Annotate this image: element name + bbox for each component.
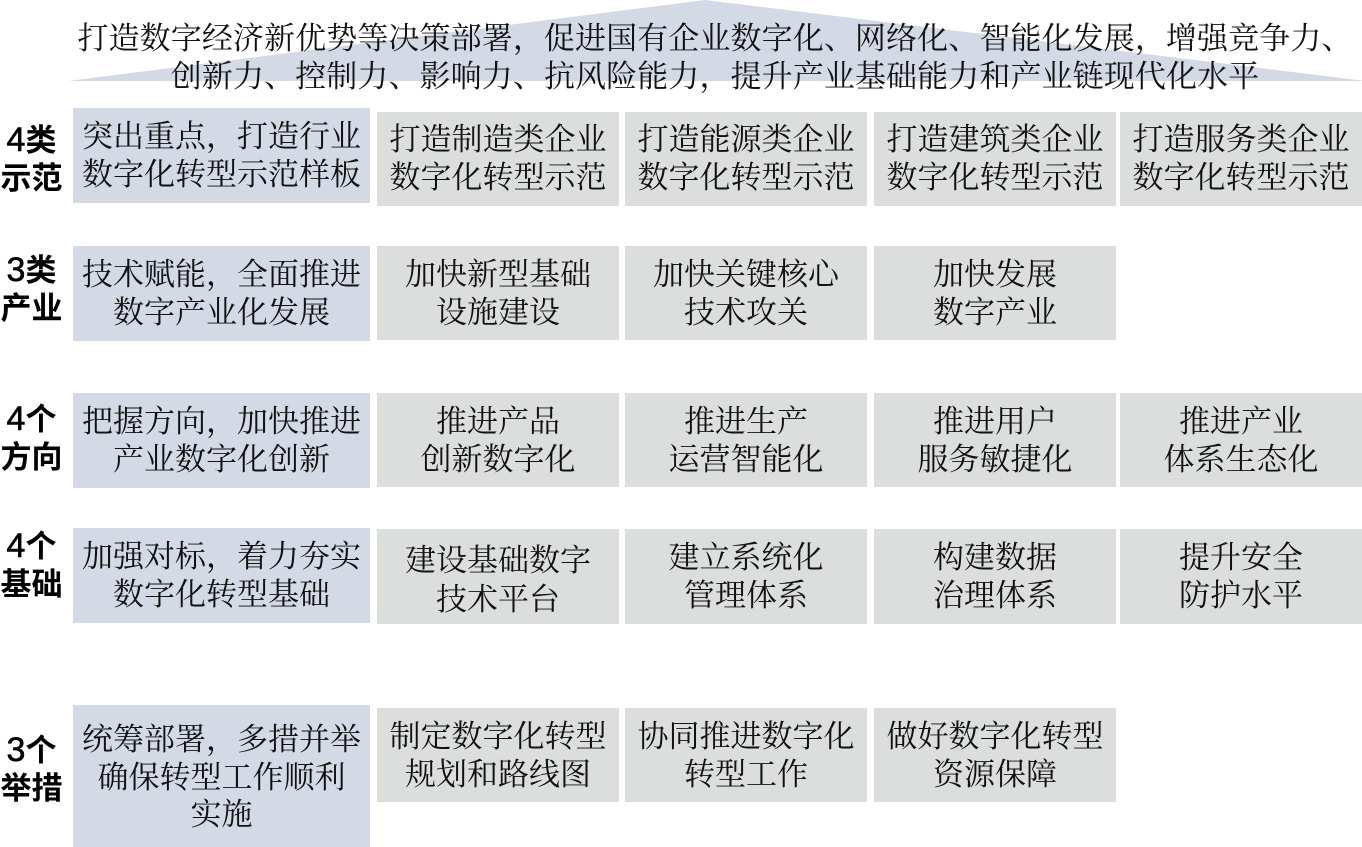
- row 5 heading box: 统筹部署，多措并举: [82, 714, 361, 759]
- box: 制造类: 打造制造类企业: [390, 114, 606, 159]
- box: 产业体系: 体系生态化: [1164, 434, 1318, 478]
- row 2 heading box: 技术赋能，全面推进: [82, 249, 361, 294]
- box: 关键核心技术: 加快关键核心: [653, 249, 839, 294]
- box: 管理体系: 建立系统化: [668, 532, 824, 577]
- row 3 heading box: [73, 393, 370, 488]
- box: 服务类: 数字化转型示范: [1132, 152, 1350, 196]
- box: 服务类: 打造服务类企业: [1132, 114, 1350, 159]
- row 1 heading box: 突出重点，打造行业: [82, 111, 361, 156]
- box: 建筑类: 打造建筑类企业: [886, 114, 1104, 159]
- box: 技术平台: [377, 529, 619, 624]
- box: 管理体系: 管理体系: [684, 570, 808, 614]
- box: 关键核心技术: [625, 246, 867, 340]
- row label: 4个基础: [0, 527, 62, 602]
- row 4 heading box: 数字化转型基础: [113, 568, 330, 614]
- row 3 heading box: 把握方向，加快推进: [82, 396, 361, 441]
- box: 规划路线图: [377, 708, 619, 802]
- row 1 heading box: 数字化转型示范样板: [82, 148, 361, 194]
- box: 资源保障: 资源保障: [933, 748, 1057, 794]
- box: 服务类: [1120, 112, 1362, 206]
- box: 规划路线图: 规划和路线图: [405, 748, 591, 794]
- box: 能源类: [625, 112, 867, 206]
- row 2 heading box: 数字产业化发展: [113, 286, 330, 332]
- box: 生产运营: [625, 393, 867, 487]
- box: 用户服务: 服务敏捷化: [918, 434, 1072, 478]
- row 5 heading box: 确保转型工作顺利: [98, 752, 346, 796]
- box: 技术平台: 建设基础数字: [405, 535, 591, 580]
- box: 用户服务: [874, 393, 1116, 487]
- box: 安全防护: 防护水平: [1179, 570, 1303, 614]
- row 1 heading box: [73, 108, 370, 203]
- row 5 heading box: 实施: [190, 789, 252, 834]
- box: 产业体系: [1120, 393, 1362, 487]
- box: 数字产业: 数字产业: [933, 286, 1057, 332]
- row 4 heading box: [73, 528, 370, 623]
- row label: 4个方向: 4个: [7, 400, 56, 438]
- box: 技术平台: 技术平台: [436, 574, 560, 618]
- box: 建筑类: 数字化转型示范: [886, 152, 1104, 196]
- row label: 4个基础: 基础: [0, 567, 62, 602]
- box: 产品创新: 推进产品: [436, 396, 560, 441]
- row label: 3个举措: 3个: [7, 731, 56, 769]
- row label: 4类示范: [0, 121, 62, 196]
- box: 数字产业: [874, 246, 1116, 340]
- row 3 heading box: 产业数字化创新: [113, 434, 330, 478]
- box: 产业体系: 推进产业: [1179, 396, 1303, 441]
- row label: 3个举措: 举措: [0, 771, 62, 806]
- row 2 heading box: [73, 246, 370, 341]
- box: 能源类: 打造能源类企业: [638, 114, 854, 159]
- box: 资源保障: [874, 708, 1116, 802]
- title text: 创新力、控制力、影响力、抗风险能力，提升产业基础能力和产业链现代化水平: [171, 50, 1259, 96]
- box: 规划路线图: 制定数字化转型: [390, 711, 606, 756]
- row label: 3类产业: 3类: [7, 251, 56, 289]
- row label: 4个基础: 4个: [7, 527, 56, 565]
- box: 产品创新: 创新数字化: [420, 434, 576, 478]
- box: 安全防护: [1120, 529, 1362, 624]
- box: 用户服务: 推进用户: [933, 396, 1057, 441]
- box: 数据治理: [874, 529, 1116, 624]
- row label: 3类产业: [0, 251, 62, 326]
- box: 协同推进: [625, 708, 867, 802]
- box: 关键核心技术: 技术攻关: [684, 286, 808, 332]
- row 5 heading box: [73, 705, 370, 847]
- box: 生产运营: 推进生产: [684, 396, 808, 441]
- box: 制造类: [377, 112, 619, 206]
- box: 新型基础设施: 加快新型基础: [405, 249, 591, 294]
- box: 能源类: 数字化转型示范: [638, 152, 854, 196]
- box: 协同推进: 协同推进数字化: [638, 711, 854, 756]
- row label: 4类示范: 4类: [7, 121, 56, 159]
- box: 安全防护: 提升安全: [1179, 532, 1303, 577]
- row label: 3个举措: [0, 731, 62, 806]
- box: 制造类: 数字化转型示范: [390, 152, 606, 196]
- box: 数字产业: 加快发展: [933, 249, 1057, 294]
- row label: 4个方向: [0, 400, 62, 475]
- box: 产品创新: [377, 393, 619, 487]
- row 4 heading box: 加强对标，着力夯实: [82, 531, 361, 576]
- box: 建筑类: [874, 112, 1116, 206]
- row label: 4个方向: 方向: [0, 440, 62, 475]
- row label: 4类示范: 示范: [0, 161, 62, 196]
- box: 资源保障: 做好数字化转型: [886, 711, 1104, 756]
- title text: [77, 13, 1353, 96]
- row label: 3类产业: 产业: [0, 291, 62, 326]
- box: 协同推进: 转型工作: [684, 748, 808, 794]
- box: 新型基础设施: [377, 246, 619, 340]
- box: 管理体系: [625, 529, 867, 624]
- box: 数据治理: 构建数据: [933, 532, 1057, 577]
- box: 生产运营: 运营智能化: [668, 434, 824, 478]
- box: 数据治理: 治理体系: [933, 570, 1057, 614]
- title text: 打造数字经济新优势等决策部署，促进国有企业数字化、网络化、智能化发展，增强竞争力、: [77, 13, 1353, 58]
- box: 新型基础设施: 设施建设: [436, 286, 560, 332]
